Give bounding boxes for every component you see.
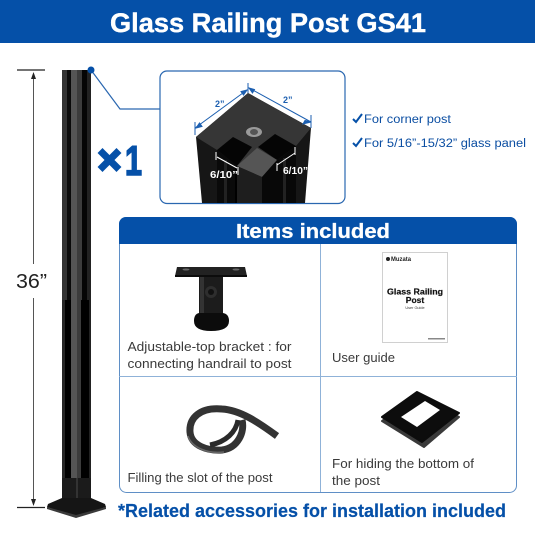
icon: user guide booklet: Muzata	[391, 257, 412, 263]
caption: filling the slot: Filling the slot of the post	[128, 470, 273, 485]
panel: items included	[119, 217, 517, 492]
caption: base cover: For hiding the bottom of	[332, 456, 474, 471]
icon: base cover plate	[382, 392, 459, 447]
glass railing post	[47, 70, 106, 518]
caption: bracket: Adjustable-top bracket : for	[128, 339, 292, 354]
dimension label: 2 inches left: 2”	[215, 99, 225, 109]
feature: glass panel size: For 5/16”-15/32” glass panel	[364, 138, 526, 150]
items included heading: Items included	[236, 221, 390, 243]
caption: base cover second line: the post	[332, 473, 380, 488]
panel: post top detail	[160, 71, 345, 204]
height dimension: 36 inches: 36”	[16, 271, 47, 293]
icon: user guide booklet: Post	[406, 295, 424, 305]
title banner	[0, 0, 535, 43]
quantity: x1: 1	[125, 137, 142, 184]
caption: bracket second line: connecting handrail to post	[128, 356, 292, 371]
connector from post top to detail panel	[88, 66, 160, 109]
dimension marks: slot width	[216, 147, 295, 175]
height dimension: 36 inches	[16, 70, 47, 508]
caption: user guide: User guide	[332, 350, 395, 365]
feature list	[353, 114, 526, 150]
dimension label: 2 inches right: 2”	[283, 95, 293, 105]
icon: adjustable-top bracket	[175, 267, 247, 331]
feature: corner post: For corner post	[364, 114, 452, 126]
post top illustration	[196, 93, 311, 203]
quantity: x1	[102, 137, 142, 184]
items included heading	[119, 217, 517, 244]
dimension lines	[195, 83, 311, 135]
check icon: glass panel	[353, 138, 362, 146]
title banner: Glass Railing Post GS41	[110, 8, 426, 38]
check icon: corner post	[353, 114, 362, 122]
icon: user guide booklet: User Guide	[405, 306, 425, 310]
footnote: *Related accessories for installation included	[118, 501, 506, 521]
dimension label: 6/10 inch right: 6/10”	[283, 166, 308, 177]
icon: rubber filler strip	[188, 409, 277, 452]
dimension label: 6/10 inch left: 6/10”	[210, 170, 238, 181]
icon: user guide booklet: Glass Railing	[387, 286, 443, 296]
icon: user guide booklet	[382, 252, 448, 342]
